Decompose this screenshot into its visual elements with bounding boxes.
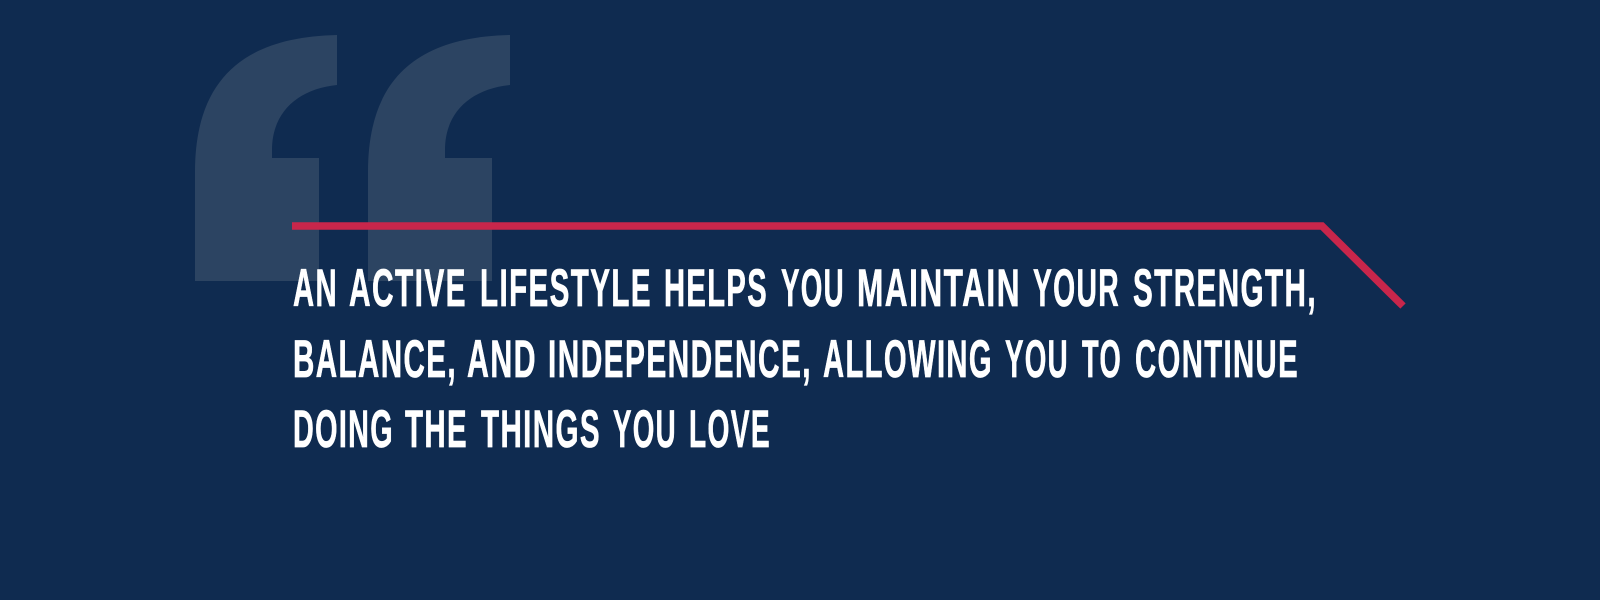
quote text: MAINTAIN xyxy=(857,259,1021,318)
quote text: THINGS xyxy=(481,400,601,459)
quote text: BALANCE, xyxy=(293,330,457,389)
quote text: AND xyxy=(467,330,537,389)
quote text: TO xyxy=(1082,330,1122,389)
quote text: YOU xyxy=(1005,330,1069,389)
quote text: YOU xyxy=(613,400,677,459)
accent line: red bent rule xyxy=(292,226,1403,306)
quote text: ACTIVE xyxy=(349,259,467,318)
quote text: THE xyxy=(405,400,468,459)
quote text: CONTINUE xyxy=(1135,330,1299,389)
quote text: LIFESTYLE xyxy=(480,259,652,318)
quote text: LOVE xyxy=(689,400,771,459)
quote text: INDEPENDENCE, xyxy=(548,330,812,389)
quote text: STRENGTH, xyxy=(1133,259,1317,318)
quote text: DOING xyxy=(293,400,394,459)
icon: large quotation mark xyxy=(195,35,510,281)
quote text: ALLOWING xyxy=(823,330,993,389)
quote text xyxy=(293,259,1317,459)
quote text: YOUR xyxy=(1033,259,1120,318)
quote text: AN xyxy=(293,259,338,318)
quote text: YOU xyxy=(781,259,845,318)
quote text: HELPS xyxy=(664,259,768,318)
